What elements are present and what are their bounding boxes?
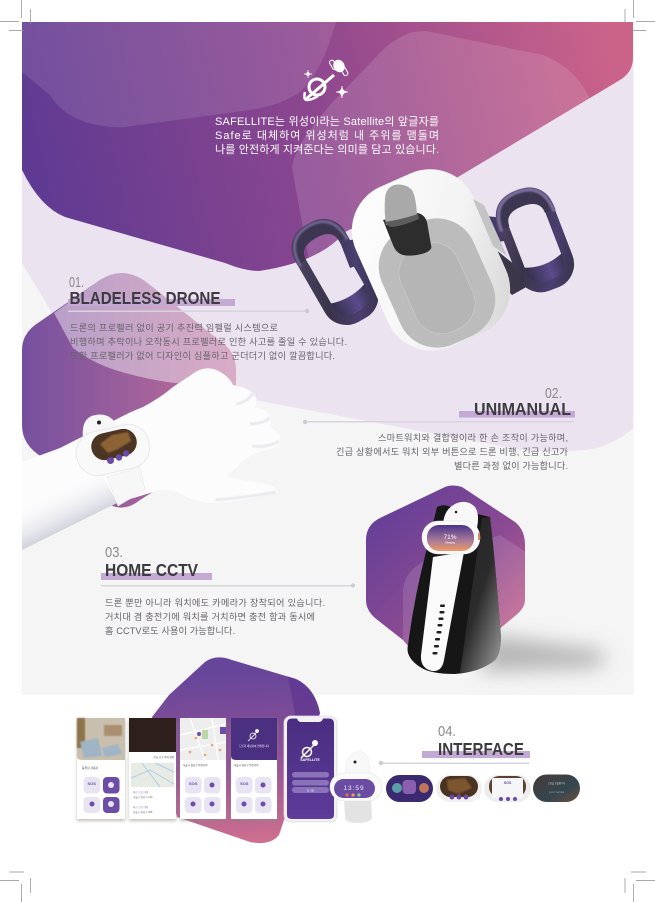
curtain	[77, 718, 85, 748]
side panel shade	[473, 199, 507, 256]
translucent light upper shape	[54, 273, 236, 388]
hand with smartwatch	[22, 368, 280, 550]
purple header	[231, 718, 277, 760]
rule with dot	[68, 309, 309, 313]
white strap	[421, 552, 464, 671]
app screen 4	[231, 718, 277, 819]
left connector	[340, 238, 368, 268]
intro text: SAFELLITE는 위성이라는 Satellite의 앞글자를	[215, 115, 439, 128]
app screen 3	[180, 718, 226, 819]
top bump	[443, 502, 478, 528]
app dots	[345, 793, 361, 797]
room photo	[77, 718, 125, 760]
app screen 2	[129, 718, 176, 819]
grey poster panel	[22, 22, 634, 695]
screen drop shadows	[77, 720, 277, 821]
watch buttons	[107, 450, 129, 464]
body text: 스마트워치와 결합형이라 한 손 조작이 가능하며,	[378, 432, 568, 443]
body text	[70, 322, 347, 361]
lens	[354, 760, 356, 764]
body text: 비행하며 추락이나 오작동시 프로펠러로 인한 사고를 줄일 수 있습니다.	[70, 336, 347, 347]
arm shading	[22, 470, 117, 550]
body text: 홈 CCTV로도 사용이 가능합니다.	[105, 625, 235, 636]
phone screen	[287, 718, 334, 819]
inner plate	[390, 233, 484, 343]
intro text: 나를 안전하게 지켜준다는 의미를 담고 있습니다.	[215, 142, 439, 156]
highlight bar	[422, 751, 530, 758]
number 01: 01.	[69, 274, 84, 291]
highlight bar	[68, 299, 235, 306]
icon: satellite logo	[304, 58, 349, 100]
screen	[334, 779, 375, 798]
battery percent: 71%	[443, 534, 457, 541]
lighter overlay	[403, 535, 525, 646]
grey tab	[385, 185, 417, 225]
tiles: SOS	[87, 781, 96, 786]
time: 13:59	[343, 785, 365, 792]
section 04: interface	[379, 723, 530, 765]
map roads	[131, 763, 174, 787]
number 03: 03.	[105, 544, 123, 561]
watch body	[72, 420, 154, 480]
intro text	[215, 115, 439, 156]
heading: BLADELESS DRONE	[70, 288, 220, 308]
map	[180, 718, 226, 760]
title: 긴급 신고 위치 확인	[154, 755, 175, 759]
watch with clock	[330, 752, 382, 823]
body text	[105, 597, 325, 636]
address: 서울시 강남구 안전지역	[183, 763, 207, 767]
login label: 로그인	[307, 788, 315, 792]
lower right arm	[490, 245, 530, 295]
tab edge	[384, 214, 419, 227]
hand	[22, 368, 280, 550]
watch strap	[107, 467, 145, 506]
pill screen: sos alert: SOS	[504, 781, 512, 785]
body text: 드론 뿐만 아니라 워치에도 카메라가 장착되어 있습니다.	[105, 597, 325, 608]
charging stand with watch	[408, 502, 501, 674]
app screen 1	[77, 718, 125, 819]
left handle	[282, 210, 385, 330]
section 03: home cctv	[101, 544, 355, 636]
highlight bar	[101, 573, 212, 580]
header text: 드론과 세팅하여 연결합니다	[239, 744, 270, 748]
drone product	[282, 154, 580, 366]
section 02: unimanual	[303, 385, 575, 471]
pill screen: dark message: 드론을 호출합니다	[548, 781, 566, 785]
intro text: Safe로 대체하여 위성처럼 내 주위를 맴돌며	[215, 128, 439, 142]
number 04: 04.	[438, 723, 456, 740]
tiles: SOS	[189, 781, 198, 786]
camera lens	[455, 511, 457, 513]
charging label: Charging	[445, 542, 456, 544]
black clip	[383, 213, 431, 256]
list text: 최근 신고 내역	[133, 805, 148, 809]
rule with dot	[303, 420, 574, 424]
pill screen: menu	[386, 775, 433, 802]
input fields	[292, 772, 329, 793]
watch stand shadow	[480, 635, 606, 672]
list text	[133, 790, 153, 814]
finger shading	[215, 393, 279, 500]
body text	[336, 432, 569, 471]
screen light	[100, 432, 131, 453]
highlight bar	[459, 411, 575, 418]
watch screen	[427, 525, 474, 551]
heading: INTERFACE	[438, 739, 524, 759]
map roads	[180, 718, 226, 760]
right connector	[476, 215, 510, 245]
watch screen	[89, 426, 139, 463]
header logo	[248, 730, 258, 741]
side button	[220, 727, 226, 734]
light overlay: right	[292, 31, 590, 258]
dark corner	[288, 676, 320, 716]
body	[330, 773, 382, 801]
number 02: 02.	[545, 385, 562, 402]
panel: bottom purple hexagon	[152, 657, 320, 844]
side button	[478, 533, 480, 540]
smartphone	[284, 716, 337, 822]
strap holes	[432, 604, 445, 654]
body text: 긴급 상황에서도 워치 외부 버튼으로 드론 비행, 긴급 신고가	[336, 446, 569, 457]
body text: 거치대 겸 충전기에 워치를 거치하면 충전 함과 동시에	[105, 611, 315, 622]
night photo	[129, 718, 176, 752]
watch body	[422, 521, 480, 554]
camera bump	[83, 415, 118, 442]
list text: 최근 신고 내역	[133, 790, 148, 794]
grey plate	[366, 206, 508, 360]
pill screen: dark message: 잠시만 기다려주세요	[549, 790, 565, 794]
drone body	[336, 154, 526, 366]
heading: HOME CCTV	[105, 560, 198, 580]
list text: 서울시 강남구 123	[133, 795, 153, 799]
park	[202, 730, 208, 739]
map	[131, 763, 174, 787]
map pins	[189, 737, 221, 756]
phone logo	[301, 740, 318, 758]
body text: 별다른 과정 없이 가능합니다.	[454, 461, 568, 471]
list text: 서울시 강남구 456	[133, 810, 153, 814]
section 01: bladeless drone	[68, 274, 347, 361]
pill screen: dark message	[533, 774, 580, 802]
light overlay: top left	[22, 22, 336, 127]
body text: 또한 프로펠러가 없어 디자인이 심플하고 군더더기 없이 깔끔합니다.	[70, 350, 335, 361]
rule with dot	[379, 761, 529, 765]
rule with dot	[101, 583, 355, 588]
right handle	[488, 180, 580, 295]
lilac background shape	[22, 22, 634, 451]
panel: hexagon behind watch stand	[366, 486, 525, 646]
address: 서울시 강남구 안전지역	[234, 763, 258, 767]
purple pin	[197, 732, 201, 736]
stand	[408, 505, 501, 674]
stand right panel	[460, 517, 501, 673]
panel: purple hexagon behind section 01	[22, 273, 236, 508]
strap	[344, 798, 372, 823]
wall shelf	[104, 725, 122, 736]
camera lens	[97, 420, 101, 424]
heading: UNIMANUAL	[474, 399, 571, 419]
sofa and table	[80, 738, 122, 758]
bump	[345, 752, 371, 776]
label: 등록된 사용자	[82, 766, 99, 770]
purple gradient header shape	[22, 22, 633, 271]
body text: 드론의 프로펠러 없이 공기 추진력 임펠럴 시스템으로	[70, 322, 278, 333]
app name: SAFELLITE	[300, 758, 320, 762]
pill screen: camera	[436, 775, 482, 802]
pill screen: sos alert	[484, 775, 531, 802]
tiles: SOS	[240, 781, 249, 786]
